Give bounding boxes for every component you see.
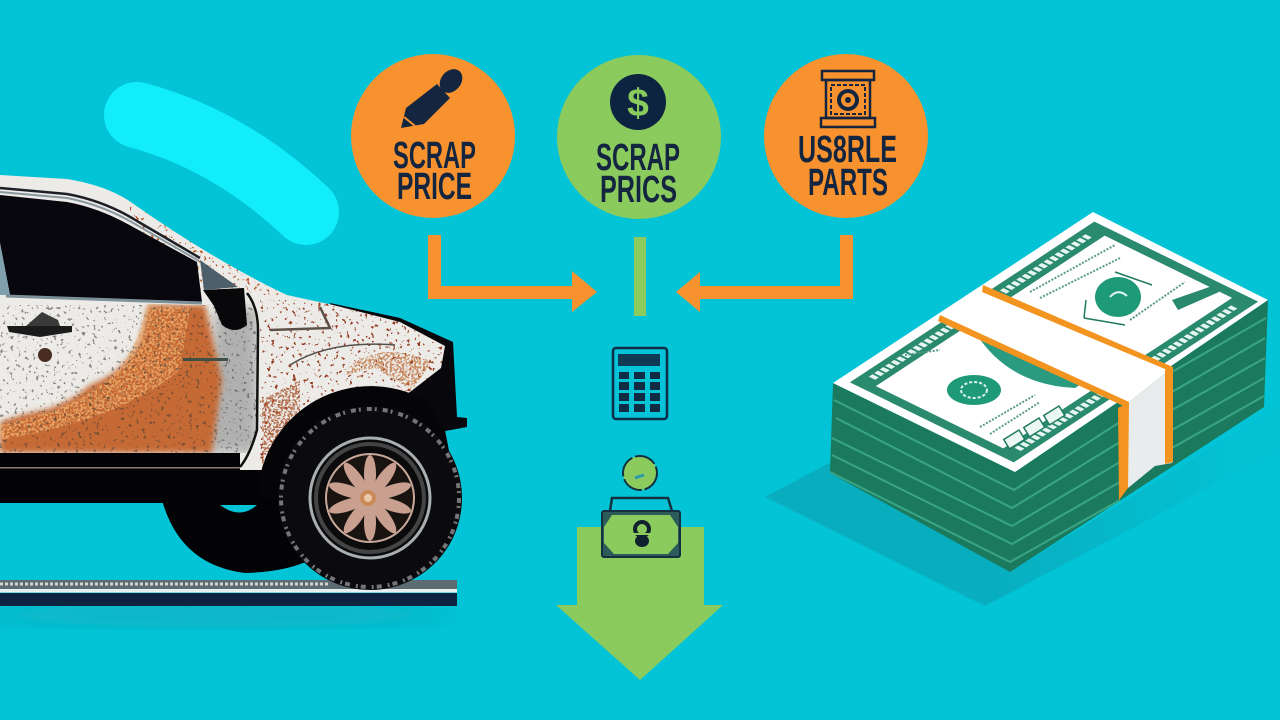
wing mirror (200, 260, 247, 330)
stack sides (830, 300, 1268, 572)
label: usable parts: US8RLE (798, 129, 897, 171)
banknote print lines (905, 245, 1185, 434)
front wheel (278, 406, 462, 590)
circle: usable parts (764, 54, 928, 218)
car front bumper (330, 303, 467, 432)
stack shadow (765, 405, 1280, 606)
ramp (0, 580, 457, 606)
circle: scrap price (351, 54, 515, 218)
portrait seal back (1095, 277, 1141, 317)
icon: coin and banknote (602, 456, 680, 557)
label: usable parts: PARTS (808, 162, 888, 204)
arrow: large green down arrow (556, 527, 723, 680)
top banknote (833, 212, 1268, 472)
illustration: stack of banknotes (765, 212, 1280, 606)
arrow: center green bar (634, 237, 646, 316)
paper band (938, 285, 1173, 500)
icon: dollar coin: $ (627, 82, 649, 125)
rust speckles on fender and hood (130, 205, 450, 470)
wheel spokes (327, 455, 413, 541)
corner numeral back (1172, 285, 1219, 310)
illustration: rusty car on ramp (0, 175, 467, 627)
arrow: left orange elbow (428, 235, 597, 312)
label: scrap price: SCRAP (393, 135, 476, 177)
door frame (240, 293, 258, 467)
portrait seal front (947, 375, 1001, 405)
decorative cyan swoosh (137, 115, 306, 212)
rust patch on door (0, 305, 260, 453)
circle: scrap prics (557, 55, 721, 219)
label: scrap prics: SCRAP (596, 137, 680, 179)
label: scrap price: PRICE (397, 166, 472, 208)
car body paint (0, 175, 445, 470)
arrow: right orange elbow (676, 235, 853, 312)
label: scrap prics: PRICS (600, 169, 677, 211)
front wheel arch (258, 386, 458, 498)
coin (623, 456, 657, 490)
icon: dollar coin (610, 74, 666, 130)
car underbody and rear wheel shadow (0, 453, 310, 573)
teal crescent (977, 325, 1090, 388)
icon: pencil (401, 65, 467, 128)
icon: parts box (821, 71, 875, 127)
icon: calculator (613, 348, 667, 419)
corner numeral front (1004, 406, 1065, 449)
car side window (0, 195, 202, 302)
door handle (7, 312, 72, 362)
banknote (602, 498, 680, 557)
